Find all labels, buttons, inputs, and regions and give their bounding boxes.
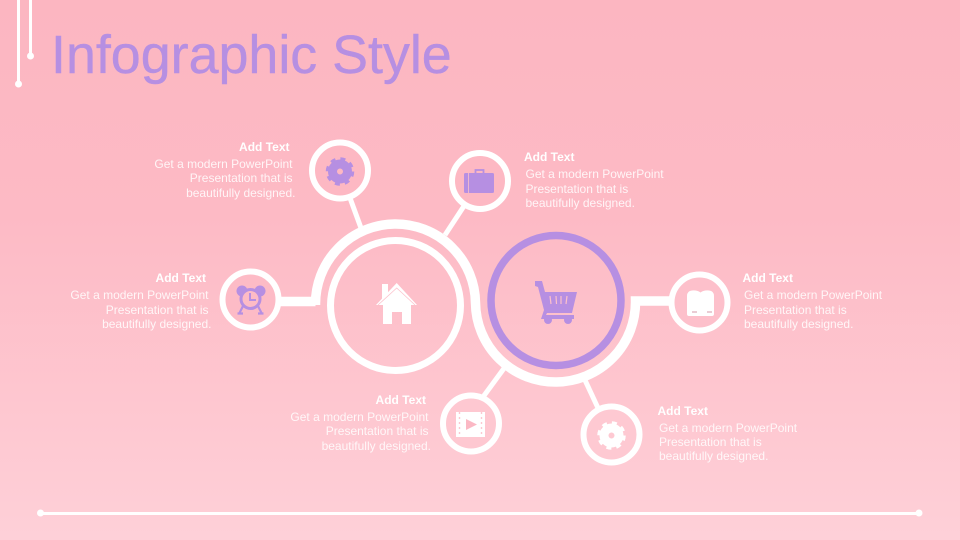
- text block: top right: Presentation that is: [526, 182, 628, 196]
- text block: top right: Get a modern PowerPoint: [526, 167, 664, 181]
- text block: middle right: Get a modern PowerPoint: [744, 288, 883, 302]
- connector: video: [483, 367, 505, 397]
- text block: middle right: Presentation that is: [744, 303, 847, 317]
- node: video: [443, 396, 499, 452]
- decorative bottom line: [37, 510, 922, 516]
- icon: gear white: [599, 423, 624, 448]
- text block: top left: Add Text: [239, 140, 290, 154]
- node: gear: [312, 142, 368, 198]
- text block: bottom right: [658, 404, 798, 463]
- text block: bottom right: Get a modern PowerPoint: [659, 421, 798, 435]
- connector: briefcase: [445, 206, 464, 235]
- icon: briefcase: [464, 170, 494, 193]
- text block: middle right: Add Text: [742, 271, 793, 285]
- text block: middle left: Presentation that is: [106, 303, 208, 317]
- decorative top-left lines: [15, 0, 34, 88]
- icon: book: [687, 290, 714, 316]
- text block: top right: [524, 150, 664, 210]
- text block: bottom right: beautifully designed.: [659, 449, 768, 463]
- S-curve backbone: [262, 224, 672, 382]
- text block: middle left: Get a modern PowerPoint: [70, 288, 209, 302]
- icon: house: [376, 283, 417, 324]
- connector: gear: [350, 198, 361, 228]
- text block: bottom center: beautifully designed.: [322, 439, 431, 453]
- title: Infographic Style: [51, 25, 452, 85]
- text block: middle left: Add Text: [156, 271, 206, 285]
- text block: top right: beautifully designed.: [526, 196, 635, 210]
- connector: lower gear: [584, 378, 598, 408]
- text block: top left: [154, 140, 296, 200]
- node: lower gear: [584, 406, 640, 462]
- text block: top left: beautifully designed.: [186, 186, 296, 200]
- text block: middle right: beautifully designed.: [744, 317, 853, 331]
- text block: middle left: beautifully designed.: [102, 317, 212, 331]
- node: briefcase: [452, 153, 508, 209]
- text block: top right: Add Text: [524, 150, 574, 164]
- text block: middle left: [70, 271, 212, 331]
- text block: middle right: [742, 271, 883, 331]
- text block: bottom center: Get a modern PowerPoint: [290, 410, 429, 424]
- text block: bottom center: Add Text: [376, 393, 426, 407]
- text block: bottom right: Add Text: [658, 404, 708, 418]
- icon: alarm clock: [236, 286, 266, 314]
- text block: top left: Get a modern PowerPoint: [154, 157, 293, 171]
- node: book: [672, 274, 728, 330]
- node: alarm clock: [222, 272, 278, 328]
- text block: top left: Presentation that is: [190, 171, 292, 185]
- icon: shopping cart: [535, 281, 577, 324]
- home circle: [330, 240, 460, 370]
- text block: bottom center: [290, 393, 431, 453]
- text block: bottom center: Presentation that is: [326, 424, 428, 438]
- icon: video: [456, 412, 485, 437]
- text block: bottom right: Presentation that is: [659, 435, 762, 449]
- purple cart circle: [491, 236, 621, 366]
- icon: gear: [328, 159, 352, 184]
